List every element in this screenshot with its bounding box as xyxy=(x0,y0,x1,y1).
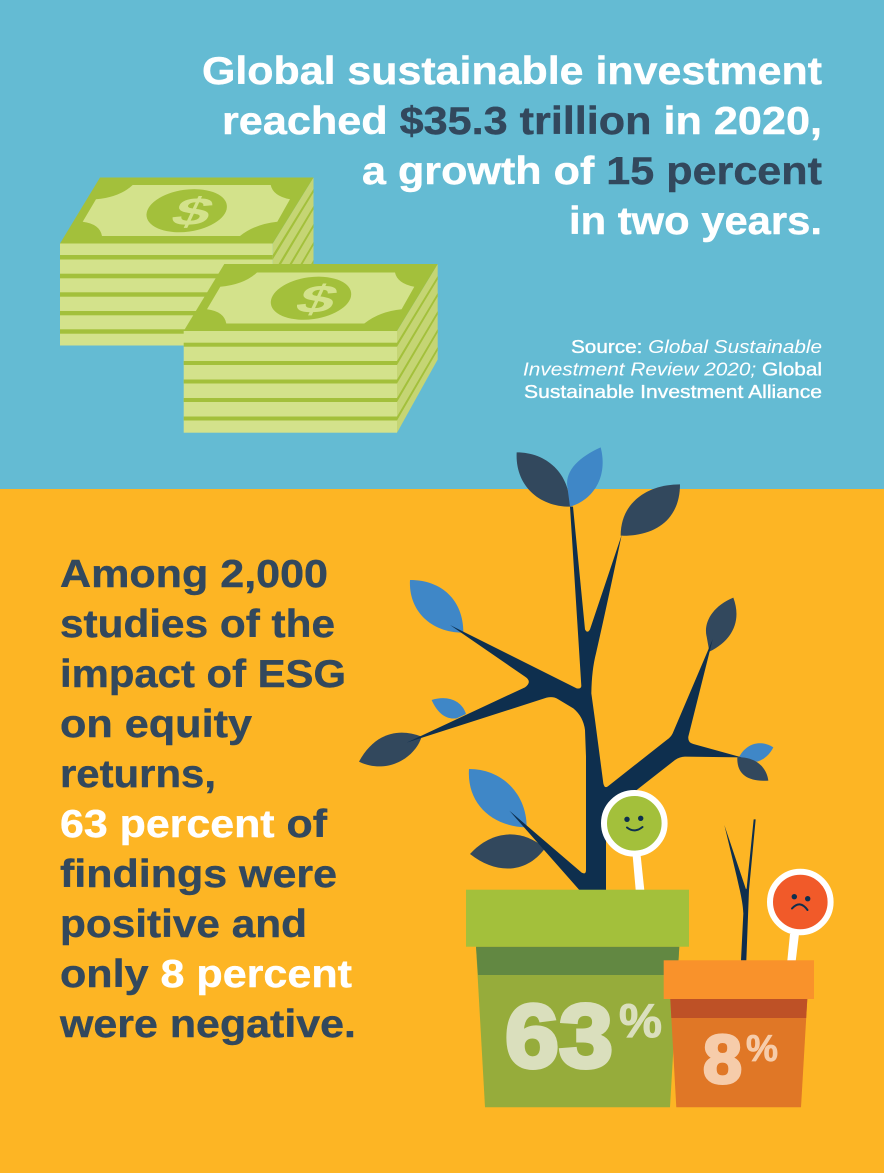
text block: ESG study findings: Among 2,000 xyxy=(60,553,328,596)
text block: ESG study findings: returns, xyxy=(60,753,216,796)
heading: global sustainable investment: a growth of 15 percent xyxy=(362,150,822,193)
heading: global sustainable investment: Global sustainable investment xyxy=(202,50,822,93)
text block: source: Sustainable Investment Alliance xyxy=(524,382,822,402)
icon: front money stack xyxy=(184,264,438,433)
text block: ESG study findings: impact of ESG xyxy=(60,653,346,696)
icon: sad face sign xyxy=(770,872,831,961)
illustration: tree with leaves xyxy=(359,447,773,890)
label: 63 percent: 63 xyxy=(505,987,613,1087)
heading: global sustainable investment xyxy=(202,50,822,243)
text block: ESG study findings: positive and xyxy=(60,903,307,946)
label: 8 percent: % xyxy=(746,1028,778,1069)
text block: ESG study findings xyxy=(59,553,356,1046)
text block: ESG study findings: 63 percent of xyxy=(60,803,328,846)
text block: source: Source: Global Sustainable xyxy=(571,337,822,357)
text block: source: Investment Review 2020; Global xyxy=(523,360,822,380)
label: 63 percent xyxy=(505,987,662,1087)
text block: source xyxy=(523,337,822,402)
icon: happy face sign xyxy=(604,793,665,890)
icon: small orange pot xyxy=(664,960,814,1107)
text block: ESG study findings: findings were xyxy=(60,853,337,896)
illustration: bare sprig xyxy=(724,819,756,960)
panel: blue background xyxy=(0,0,884,490)
panel: yellow background xyxy=(0,489,884,1173)
label: 63 percent: % xyxy=(619,994,662,1047)
tree trunk and branches xyxy=(407,507,742,890)
text block: ESG study findings: on equity xyxy=(60,703,252,746)
label: 8 percent xyxy=(703,1021,778,1098)
icon: back money stack: $ xyxy=(164,189,222,233)
heading: global sustainable investment: reached $35.3 trillion in 2020, xyxy=(222,100,822,143)
icon: front money stack: $ xyxy=(289,277,346,321)
leaves xyxy=(359,447,773,869)
text block: ESG study findings: only 8 percent xyxy=(60,953,352,996)
label: 8 percent: 8 xyxy=(703,1021,742,1098)
icon: large green pot xyxy=(466,890,689,1107)
icon: back money stack xyxy=(60,178,314,346)
text block: ESG study findings: were negative. xyxy=(59,1003,356,1046)
heading: global sustainable investment: in two years. xyxy=(569,200,822,243)
text block: ESG study findings: studies of the xyxy=(60,603,335,646)
